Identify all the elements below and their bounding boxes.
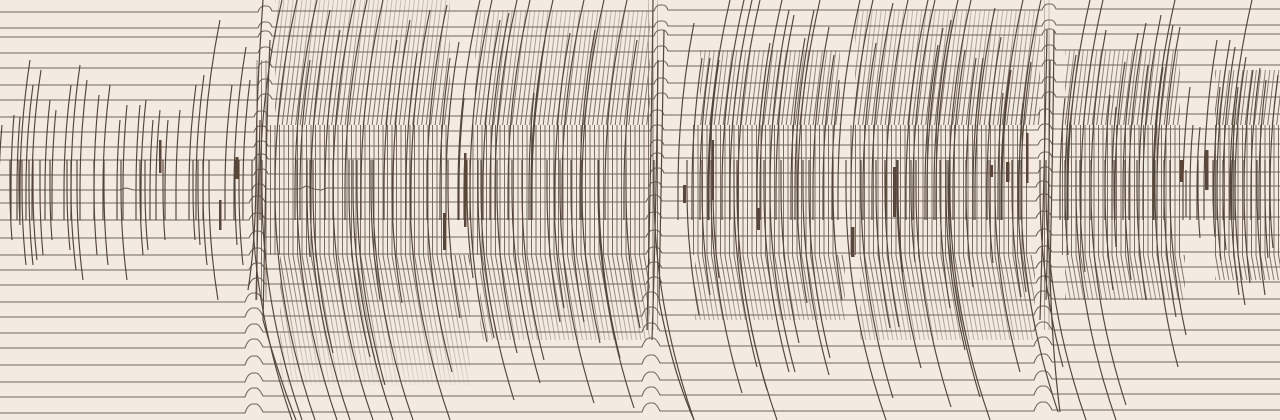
opening burst upper strokes	[0, 20, 250, 220]
burst five	[1021, 0, 1186, 420]
burst six	[1183, 0, 1278, 305]
burst three	[654, 0, 842, 420]
fine tremor hatching	[256, 0, 1280, 385]
time-mark columns	[248, 0, 1060, 420]
burst two	[458, 0, 640, 408]
burst one	[252, 0, 465, 420]
small opening burst	[0, 20, 250, 300]
heavy ink blots	[159, 133, 1208, 257]
opening burst lower strokes	[10, 160, 243, 300]
burst four	[838, 0, 1041, 420]
